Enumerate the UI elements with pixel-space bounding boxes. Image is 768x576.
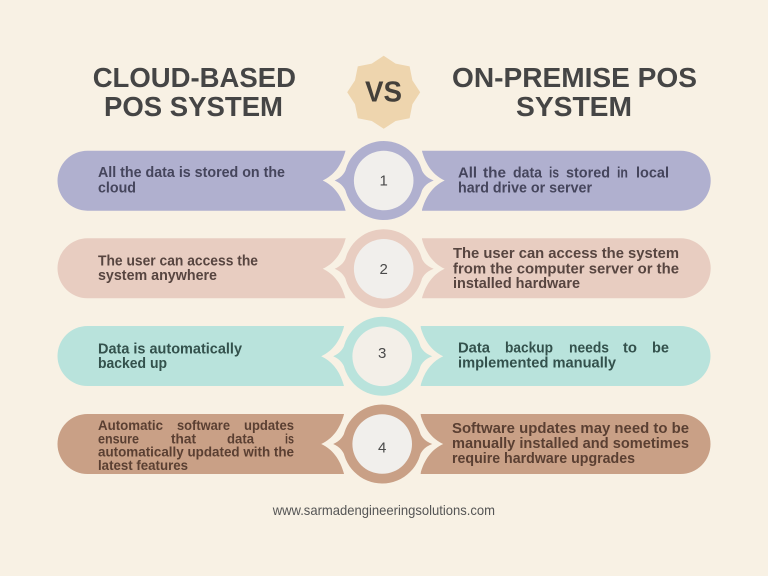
right text: to xyxy=(623,341,637,357)
number badge 3: 3 xyxy=(378,345,386,362)
left text: Data is automatically xyxy=(98,341,243,357)
row 3: data backup xyxy=(58,317,711,396)
right text: backup xyxy=(505,341,553,357)
left text: The user can access the xyxy=(98,253,258,269)
left pill xyxy=(58,414,344,474)
right text: manually installed and sometimes xyxy=(452,436,689,452)
right text: hard drive or server xyxy=(458,181,592,197)
badge: VS star: VS xyxy=(365,77,402,109)
number badge 3 xyxy=(321,317,443,396)
right text: stored xyxy=(566,166,610,182)
left pill xyxy=(58,151,346,211)
row 2: system access xyxy=(58,229,711,308)
right text: Software updates may need to be xyxy=(452,421,689,437)
right text: be xyxy=(652,341,669,357)
right text: is xyxy=(549,166,559,182)
title: on-premise POS system: SYSTEM xyxy=(516,91,632,122)
right pill xyxy=(422,238,711,298)
left text: Automatic xyxy=(98,418,163,433)
left text: backed up xyxy=(98,356,167,372)
left pill xyxy=(58,326,344,386)
right text: installed hardware xyxy=(453,276,580,292)
left text: updates xyxy=(244,418,294,433)
number badge 2: 2 xyxy=(380,261,388,278)
right text: the xyxy=(483,166,506,182)
number badge 2 xyxy=(323,229,445,308)
right text: require hardware upgrades xyxy=(452,451,635,467)
right text: data xyxy=(513,166,543,182)
number badge 4 xyxy=(321,404,443,484)
left text: is xyxy=(285,431,294,446)
right text: local xyxy=(636,166,669,182)
left pill xyxy=(58,238,346,298)
left text: latest features xyxy=(98,458,188,473)
right pill xyxy=(421,326,710,386)
left text: system anywhere xyxy=(98,268,217,284)
right text: The user can access the system xyxy=(453,246,679,262)
right text: from the computer server or the xyxy=(453,261,679,277)
left text: All the data is stored on the xyxy=(98,165,285,181)
row 1: data storage xyxy=(58,141,711,220)
right pill xyxy=(421,414,710,474)
title: cloud-based POS system: POS SYSTEM xyxy=(104,91,283,122)
right text: needs xyxy=(569,341,609,357)
left text: software xyxy=(177,418,230,433)
right pill xyxy=(422,151,711,211)
left text: data xyxy=(227,431,254,446)
right text: in xyxy=(617,166,628,182)
left text: that xyxy=(171,431,196,446)
number badge 1: 1 xyxy=(380,173,388,190)
right text: Data xyxy=(458,341,491,357)
number badge 4: 4 xyxy=(378,439,386,456)
left text: cloud xyxy=(98,180,136,196)
badge: VS star xyxy=(347,56,420,129)
title: cloud-based POS system: CLOUD-BASED xyxy=(93,62,296,93)
number badge 1 xyxy=(323,141,445,220)
left text: automatically updated with the xyxy=(98,445,294,460)
left text: ensure xyxy=(98,431,139,446)
row 4: software updates xyxy=(58,404,711,484)
footer: website url: www.sarmadengineeringsolutions.com xyxy=(272,503,495,518)
right text: All xyxy=(458,166,477,182)
right text: implemented manually xyxy=(458,356,617,372)
title: on-premise POS system: ON-PREMISE POS xyxy=(452,62,697,93)
